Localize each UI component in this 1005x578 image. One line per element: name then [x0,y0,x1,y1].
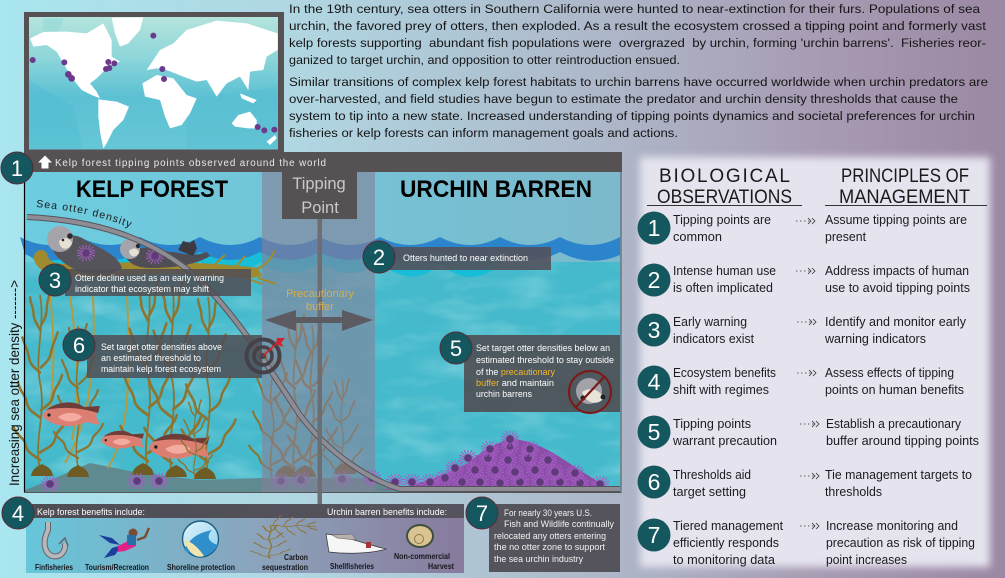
intro text: kelp forests supporting abundant fish populations were overgrazed by urchin, forming 'urchin barrens'. Fisheries reor- [289,36,986,50]
benefit labels: Harvest [428,562,454,571]
kelp stands [14,280,362,479]
icon: hook [45,522,68,556]
curve label: Sea otter density [36,200,132,228]
numbered circles on diagram: 6 [73,333,85,358]
numbered circles on diagram: 2 [373,245,385,270]
callout 5: of the precautionary [476,367,556,377]
numbered circles on diagram: 3 [49,268,61,293]
callout 6 [87,335,262,378]
callout 7: relocated any otters entering [494,531,606,541]
numbered circles on diagram: 7 [476,501,488,526]
row 2: 2 [648,267,660,293]
row 3: Early warning [673,314,747,329]
intro text: fisheries or kelp forests can inform management goals and actions. [289,126,678,140]
kelp benefits heading: Kelp forest benefits include: [37,507,145,518]
row 6: thresholds [825,484,882,499]
otters [34,226,276,284]
benefit labels: Shellfisheries [330,562,375,571]
row 5: 5 [648,419,660,445]
callout 5: urchin barrens [476,389,533,399]
row 3: warning indicators [824,331,926,346]
heading: biological observations: OBSERVATIONS [657,187,792,208]
row 7: efficiently responds [673,535,779,550]
icon: no otter [569,371,611,413]
row 4: 4 [648,369,661,395]
row 5 [638,416,979,448]
main diagram [12,172,622,493]
heading: biological observations [647,166,802,208]
heading: biological observations: BIOLOGICAL [659,166,790,187]
benefit labels: Shoreline protection [167,563,235,572]
row 2: use to avoid tipping points [825,280,970,295]
urchins in kelp forest [41,471,351,492]
icon: boat [326,534,386,553]
numbered circles on diagram: 4 [12,501,24,526]
callout 5: Set target otter densities below an [476,343,610,353]
row 5: buffer around tipping points [826,433,979,448]
icon: diver [99,528,149,558]
row 6 [638,466,972,499]
row 5: warrant precaution [672,433,777,448]
icon: shoreline [182,521,218,557]
row 2: Intense human use [673,263,776,278]
urchin mound [363,431,612,492]
tipping point box: Point [301,199,339,217]
callout 6: maintain kelp forest ecosystem [101,364,221,374]
fish [42,400,212,478]
heading: principles of management: MANAGEMENT [839,187,970,208]
callout 3 [65,269,251,296]
intro text: over-harvested, and field studies have begun to estimate the predator and urchin density thresholds that cause the [289,92,958,106]
row 7: precaution as risk of tipping [826,535,975,550]
row 1 [638,212,967,244]
row 3: indicators exist [673,331,754,346]
benefit labels: Tourism/Recreation [85,563,149,572]
row 2 [638,263,970,296]
row 7 [638,518,975,567]
row 7: 7 [648,522,660,548]
row 4: shift with regimes [673,382,769,397]
heading: urchin barren: URCHIN BARREN [400,176,592,203]
row 4 [638,365,964,398]
callout 3: Otter decline used as an early warning [75,273,224,283]
urchin benefits heading: Urchin barren benefits include: [327,507,447,518]
callout 5 [464,335,620,412]
row 1: present [825,229,866,244]
intro text: ganized to target urchin, and opposition to otter reintroduction ensued. [289,53,680,67]
heading: principles of management [825,166,987,208]
row 4: points on human benefits [825,382,964,397]
row 1: 1 [648,215,660,241]
row 5: Establish a precautionary [826,416,961,431]
heading: kelp forest: KELP FOREST [76,176,228,203]
intro text: system to tip into a new state. Increased understanding of tipping points dynamics and societal preferences for urchin [289,109,975,123]
callout 5: buffer and maintain [476,378,554,388]
benefit labels: Carbon [284,553,308,562]
row 1: Assume tipping points are [825,212,967,227]
row 3 [638,314,966,346]
row 6: target setting [673,484,746,499]
row 7: point increases [826,552,907,567]
callout 6: an estimated threshold to [101,353,201,363]
waves [20,237,620,277]
callout 6: Set target otter densities above [101,342,222,352]
row 7: Tiered management [673,518,783,533]
row 3: Identify and monitor early [825,314,966,329]
tipping point pole [318,219,322,572]
intro text: urchin, the favored prey of otters, then exploded. As a result the ecosystem crossed a tipping point and formerly vast [289,19,987,33]
row 1: Tipping points are [673,212,771,227]
benefit labels: sequestration [262,563,308,572]
callout 5: estimated threshold to stay outside [476,355,614,365]
caption bar: Kelp forest tipping points observed around the world [55,158,326,169]
benefits panel [26,504,464,573]
callout 7: For nearly 30 years U.S. [504,508,592,518]
row 5: Tipping points [673,416,751,431]
row 7: to monitoring data [673,552,776,567]
tipping point box [282,172,357,219]
icon: target [246,338,285,372]
precautionary buffer: Precautionary [286,288,354,300]
sea otter density curve [27,217,620,489]
benefit labels: Non-commercial [394,552,450,561]
tipping point band [262,172,375,492]
row 6: Tie management targets to [825,467,972,482]
heading: principles of management: PRINCIPLES OF [841,166,969,187]
water [25,262,620,492]
icon: shell [406,524,434,548]
numbered circles on diagram: 5 [450,336,462,361]
row 6: Thresholds aid [673,467,751,482]
icon: carbon kelp [251,515,317,559]
benefit labels [35,552,454,572]
panel: observations and principles [638,157,990,567]
row 2: is often implicated [673,280,773,295]
callout 2 [385,247,551,270]
tipping point box: Tipping [292,175,346,193]
callout 7: the sea urchin industry [494,554,583,564]
callout 2: Otters hunted to near extinction [403,253,528,263]
row 4: Ecosystem benefits [673,365,776,380]
row 2: Address impacts of human [825,263,969,278]
row 3: 3 [648,317,660,343]
precautionary buffer [265,288,373,331]
row 7: Increase monitoring and [826,518,958,533]
row 1: common [673,229,722,244]
row 4: Assess effects of tipping [825,365,954,380]
y axis label: Increasing sea otter density -------> [7,280,22,486]
intro text [289,2,988,140]
callout 7 [489,504,620,572]
frame lines [24,172,621,492]
intro text: In the 19th century, sea otters in Southern California were hunted to near-extinction for their furs. Populations of sea [289,2,980,16]
caption bar [24,152,622,172]
numbered circles on diagram: 1 [11,156,23,181]
world map panel [24,12,284,157]
intro text: Similar transitions of complex kelp forest habitats to urchin barrens have occurred worldwide when urchin predators are [289,75,988,89]
callout 3: indicator that ecosystem may shift [75,284,210,294]
row 6: 6 [648,469,660,495]
callout 7: the no otter zone to support [494,542,605,552]
numbered circles on diagram [1,152,498,529]
callout 7: Fish and Wildlife continually [504,519,614,529]
precautionary buffer: buffer [306,301,334,313]
sea floor [25,463,620,492]
benefit labels: Finfisheries [35,563,74,572]
